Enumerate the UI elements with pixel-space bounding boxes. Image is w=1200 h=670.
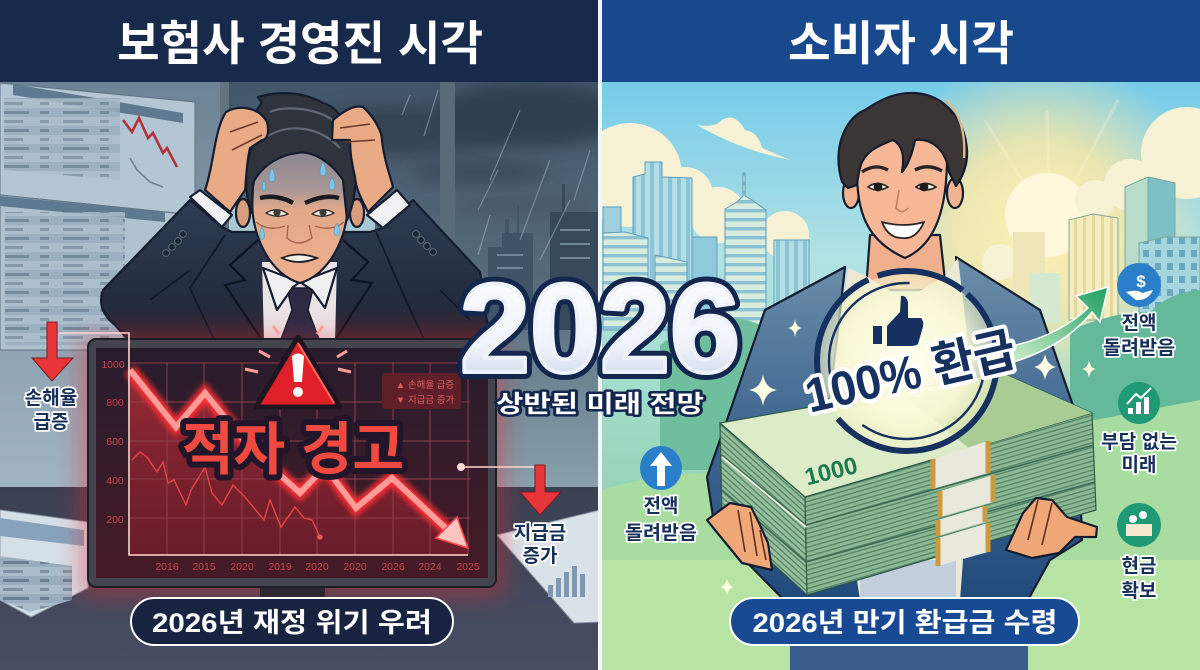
chart y axis labels: 400	[106, 475, 124, 487]
desk papers right	[497, 510, 600, 623]
banknote denomination: 1000	[802, 452, 860, 491]
chart y axis labels: 800	[106, 397, 124, 409]
right header bar	[600, 0, 1200, 82]
head	[236, 93, 364, 283]
green hills	[602, 290, 1200, 614]
chart y axis labels: 200	[106, 514, 124, 526]
thin red series	[132, 452, 320, 537]
chart y axis labels: 600	[106, 436, 124, 448]
deficit warning heading: 적자 경고	[182, 418, 404, 482]
city skyline right	[1013, 177, 1200, 323]
callout: payout increase: 지급금	[514, 522, 566, 544]
stack of banknotes	[720, 373, 1096, 595]
wall board with financial tables	[0, 83, 195, 350]
desk papers left	[0, 510, 88, 617]
icon: red down arrow	[32, 322, 73, 381]
chart x axis labels: 2024	[418, 561, 442, 573]
right hand	[332, 107, 393, 212]
center divider	[598, 0, 602, 670]
stamp: 100% refund	[800, 271, 1021, 451]
chart x axis labels: 2019	[268, 561, 292, 573]
benefit: cash secured: 현금	[1122, 555, 1156, 577]
central heading: 2026: 2026	[460, 258, 740, 399]
left cuff	[190, 190, 232, 227]
shirt lower	[860, 560, 956, 600]
benefit: full refund (right): 돌려받음	[1103, 337, 1175, 359]
monitor	[88, 339, 496, 599]
right cuff	[367, 190, 410, 228]
subtitle: 상반된 미래 전망	[496, 391, 704, 418]
line chart	[101, 359, 480, 573]
central heading: 2026: 2026	[460, 258, 740, 399]
callout: loss ratio surge: 급증	[34, 412, 68, 433]
chart x axis labels: 2020	[343, 561, 367, 573]
callout: loss ratio surge: 손해율	[25, 387, 77, 409]
hand right	[1006, 498, 1097, 558]
callout: payout increase: 증가	[523, 545, 557, 567]
jacket	[707, 257, 1082, 600]
title: 보험사 경영진 시각	[117, 17, 483, 70]
consumer figure	[707, 93, 1082, 670]
suit	[101, 200, 490, 342]
hand left	[707, 503, 772, 570]
chart x axis labels: 2025	[456, 561, 480, 573]
icon: thumbs up	[873, 296, 923, 346]
left hand	[205, 108, 268, 212]
trousers	[790, 640, 1028, 670]
callout: payout increase	[457, 463, 566, 567]
neck	[866, 235, 946, 290]
chart x axis labels	[156, 563, 480, 570]
chart x axis labels: 2016	[155, 561, 179, 573]
t-shirt	[830, 258, 975, 600]
benefit: full refund (right)	[1103, 263, 1175, 359]
chart x axis labels: 2026	[381, 561, 405, 573]
suit lapels	[225, 240, 372, 340]
big falling arrow	[130, 370, 468, 548]
benefit: worry-free future	[1101, 382, 1177, 476]
sweat drops	[259, 162, 340, 240]
red glow	[80, 338, 504, 596]
paper bands	[933, 441, 993, 566]
panel: insurer executive view	[0, 0, 625, 670]
benefit: worry-free future: 미래	[1122, 454, 1156, 476]
benefit: full refund (right): 전액	[1122, 312, 1156, 334]
finger lines	[230, 122, 375, 150]
sparkles	[720, 319, 1096, 596]
chart x axis labels: 2020	[305, 561, 329, 573]
callout: loss ratio surge	[25, 322, 77, 433]
growth arrow	[1012, 287, 1108, 362]
connector: loss ratio	[59, 333, 468, 555]
chart x axis labels: 2015	[192, 561, 216, 573]
benefit: cash secured: 확보	[1122, 580, 1156, 602]
benefit: worry-free future: 부담 없는	[1101, 431, 1177, 453]
benefit: full refund (left)	[625, 446, 697, 544]
sleeve folds and buttons	[150, 231, 470, 342]
left header bar	[0, 0, 600, 82]
city skyline left	[603, 162, 809, 330]
warning triangle icon	[245, 326, 351, 407]
benefit: full refund (right): $	[1136, 272, 1146, 291]
refund text: 100% 환급	[800, 324, 1021, 423]
benefit: cash secured	[1117, 503, 1161, 602]
chart y axis labels	[101, 359, 125, 526]
chart y axis labels: 1000	[101, 359, 125, 371]
chart legend: ▲ 손해율 급증	[396, 379, 454, 391]
icon: red down arrow	[520, 465, 561, 515]
chart legend: ▼ 지급금 증가	[396, 395, 454, 406]
benefit: full refund (left): 돌려받음	[625, 522, 697, 544]
caption pill: refund received: 2026년 만기 환급금 수령	[752, 608, 1058, 638]
sky and clouds	[602, 82, 1200, 490]
caption pill: financial crisis	[131, 598, 453, 645]
shirt and tie	[262, 262, 337, 342]
benefit: full refund (left): 전액	[644, 495, 678, 517]
office background	[0, 82, 625, 670]
title: 소비자 시각	[788, 17, 1014, 70]
executive figure	[101, 93, 490, 342]
chart legend	[382, 373, 461, 409]
head	[839, 93, 967, 258]
caption pill: refund received	[730, 598, 1079, 645]
panel: consumer view	[578, 0, 1200, 670]
chart x axis labels: 2020	[230, 561, 254, 573]
caption pill: financial crisis: 2026년 재정 위기 우려	[152, 608, 432, 638]
